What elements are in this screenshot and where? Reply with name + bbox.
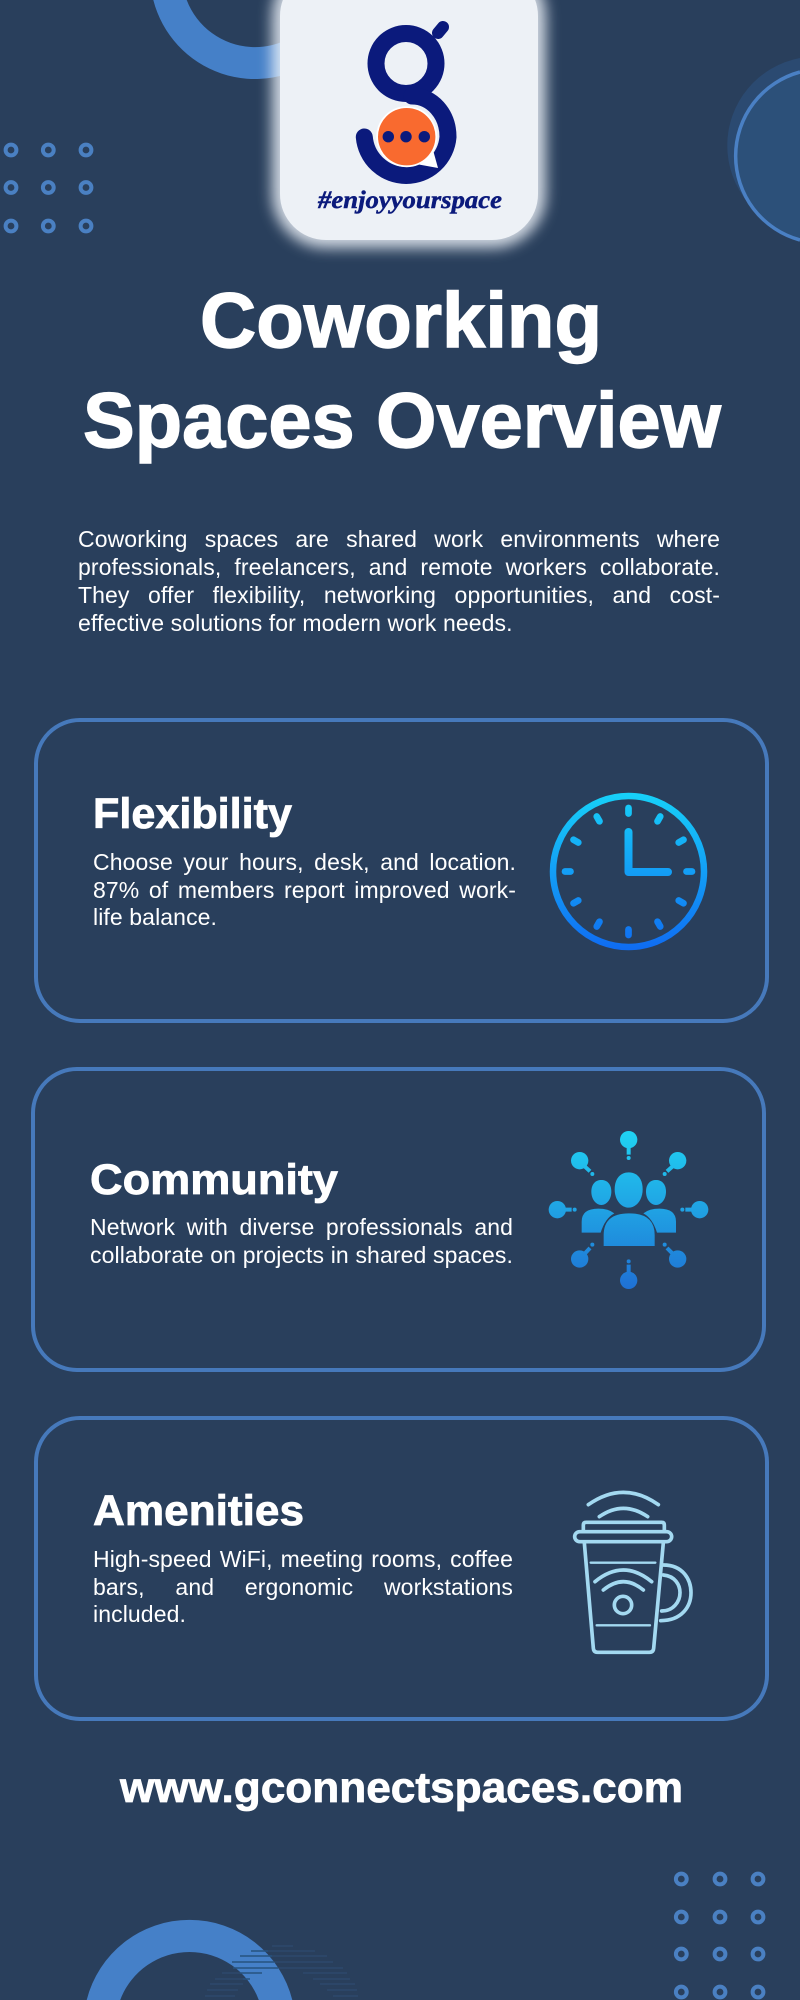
panel: flexibility — [34, 718, 769, 1023]
text: flexibility: life balance. — [93, 904, 217, 930]
heading: flexibility: Flexibility — [93, 790, 292, 838]
g ring — [364, 27, 448, 175]
title: Spaces Overview — [83, 376, 721, 464]
panel: amenities — [34, 1416, 769, 1721]
intro text: They offer flexibility, networking opportunities, and cost- — [78, 582, 720, 608]
heading: community: Community — [90, 1156, 338, 1204]
heading: amenities: Amenities — [93, 1487, 304, 1535]
dot grid bottom right — [676, 1874, 763, 1997]
logo mark — [317, 21, 502, 214]
bottom speed lines — [205, 1946, 358, 1996]
intro text: professionals, freelancers, and remote workers collaborate. — [78, 554, 720, 580]
bottom ring — [87, 1920, 292, 2000]
hashtag: #enjoyyourspace — [317, 187, 502, 214]
panel: community — [31, 1067, 766, 1372]
text: amenities: included. — [93, 1601, 186, 1627]
text: community: collaborate on projects in shared spaces. — [90, 1242, 513, 1268]
top quarter ring — [153, 0, 320, 79]
website url: www.gconnectspaces.com — [119, 1764, 683, 1812]
text: amenities: High-speed WiFi, meeting rooms, coffee — [93, 1546, 513, 1572]
title: Coworking — [200, 276, 602, 364]
chat bubble — [376, 106, 438, 168]
text: flexibility — [93, 849, 516, 930]
text: amenities: bars, and ergonomic workstations — [93, 1574, 513, 1600]
text: flexibility: 87% of members report improved work- — [93, 877, 516, 903]
intro text: Coworking spaces are shared work environments where — [78, 526, 720, 552]
intro text: effective solutions for modern work needs. — [78, 610, 513, 636]
text: community: Network with diverse professionals and — [90, 1214, 513, 1240]
text: community — [90, 1214, 513, 1268]
right circle — [727, 58, 800, 240]
text: amenities — [93, 1546, 513, 1627]
icon: people network — [548, 1131, 708, 1289]
dot grid top left — [6, 145, 91, 231]
icon: clock — [550, 792, 708, 950]
intro text — [78, 526, 720, 636]
text: flexibility: Choose your hours, desk, and location. — [93, 849, 516, 875]
logo card — [280, 0, 538, 240]
title — [83, 276, 722, 464]
icon: coffee cup wifi — [572, 1490, 693, 1654]
